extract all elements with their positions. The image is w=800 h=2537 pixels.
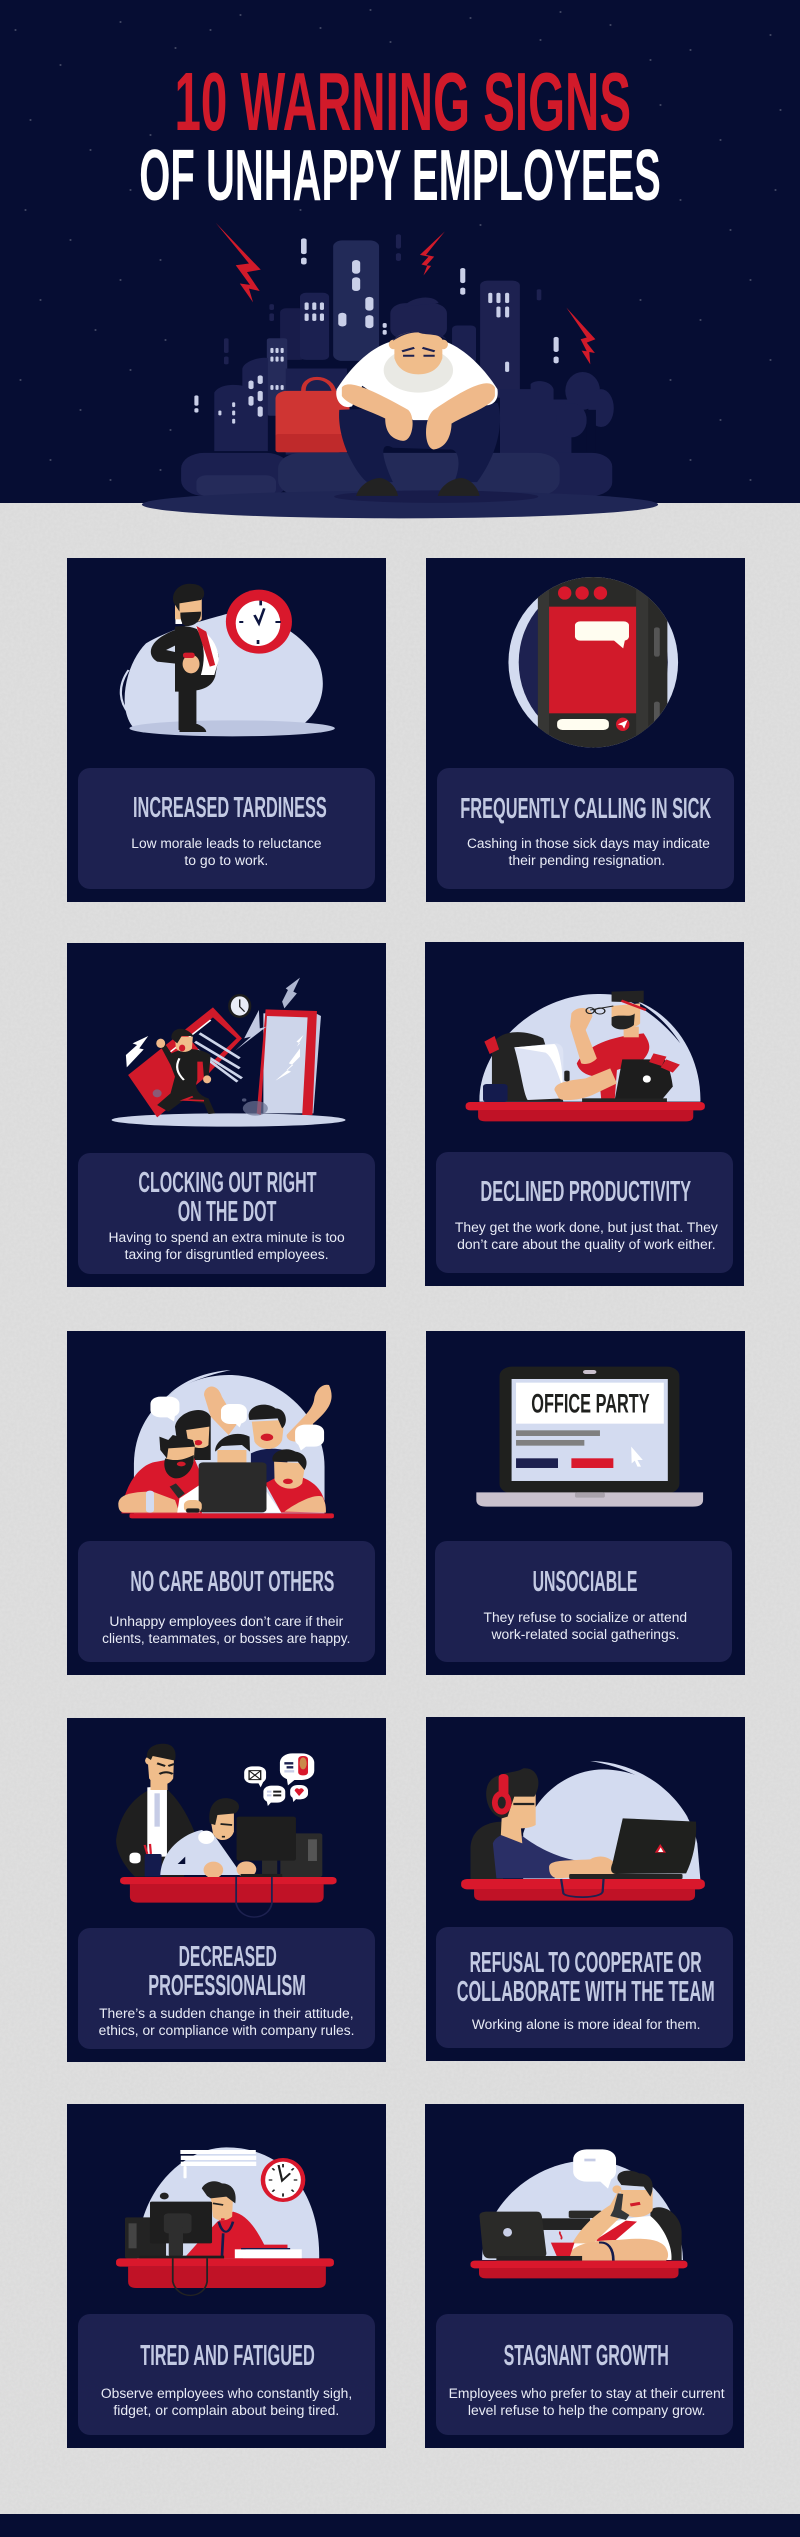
description: to go to work.	[184, 853, 268, 868]
card 5: no care about others	[67, 1331, 386, 1675]
exclamation marks	[194, 234, 559, 476]
panel background	[67, 1331, 386, 1675]
description: They refuse to socialize or attend	[484, 1610, 687, 1625]
heading: TIRED AND FATIGUED	[140, 2340, 315, 2372]
panel background	[67, 1718, 386, 2062]
description: taxing for disgruntled employees.	[125, 1247, 329, 1262]
description	[102, 1614, 350, 1646]
description	[108, 1230, 345, 1262]
description	[467, 836, 710, 868]
red bag	[276, 378, 349, 452]
panel background	[67, 558, 386, 902]
panel background	[67, 943, 386, 1287]
heading: PROFESSIONALISM	[148, 1970, 306, 2002]
card 1: increased tardiness	[67, 558, 386, 902]
description: fidget, or complain about being tired.	[113, 2403, 339, 2418]
panel background	[426, 1717, 745, 2061]
ground ellipse	[142, 491, 658, 518]
heading	[148, 1941, 306, 2002]
heading: CLOCKING OUT RIGHT	[138, 1167, 317, 1199]
illustration: laptop with office party invitation	[476, 1367, 703, 1507]
text box	[78, 2314, 375, 2435]
description: Unhappy employees don’t care if their	[109, 1614, 344, 1629]
description	[449, 2386, 725, 2418]
card 4: declined productivity	[425, 942, 744, 1286]
city skyline	[181, 240, 614, 496]
card 3: clocking out right on the dot	[67, 943, 386, 1287]
text box	[436, 2314, 733, 2435]
text box	[78, 768, 375, 889]
illustration: man checking watch beside clock	[121, 584, 335, 736]
text box	[78, 1153, 375, 1274]
illustration: relaxed man on phone	[471, 2149, 687, 2278]
card 7: decreased professionalism	[67, 1718, 386, 2062]
description: ethics, or compliance with company rules.	[99, 2023, 354, 2038]
description: their pending resignation.	[508, 853, 665, 868]
heading	[457, 1947, 715, 2008]
description: Employees who prefer to stay at their current	[449, 2386, 725, 2401]
description: don’t care about the quality of work either.	[457, 1237, 716, 1252]
text box	[78, 1928, 375, 2049]
text box	[436, 1152, 733, 1273]
heading: NO CARE ABOUT OTHERS	[130, 1566, 334, 1598]
description: level refuse to help the company grow.	[468, 2403, 705, 2418]
description: Working alone is more ideal for them.	[472, 2017, 700, 2032]
heading: DECREASED	[179, 1941, 277, 1973]
text box	[78, 1541, 375, 1662]
panel background	[426, 558, 745, 902]
description: Observe employees who constantly sigh,	[101, 2386, 352, 2401]
card 8: refusal to cooperate	[426, 1717, 745, 2061]
heading: INCREASED TARDINESS	[133, 792, 327, 824]
description	[484, 1610, 687, 1642]
card 2: frequently calling in sick	[426, 558, 745, 902]
description: clients, teammates, or bosses are happy.	[102, 1631, 350, 1646]
heading: ON THE DOT	[178, 1196, 277, 1228]
panel background	[67, 2104, 386, 2448]
footer bar	[0, 2514, 800, 2537]
lightning bolts	[216, 223, 595, 364]
illustration: man with headphones at laptop	[461, 1761, 705, 1901]
illustration: boss watching employee on social media	[116, 1744, 337, 1917]
illustration: cheering team around laptop	[118, 1370, 334, 1518]
text box	[436, 1927, 733, 2048]
description: Low morale leads to reluctance	[131, 836, 322, 851]
card 10: stagnant growth	[425, 2104, 744, 2448]
description	[101, 2386, 352, 2418]
description: Having to spend an extra minute is too	[108, 1230, 345, 1245]
description: They get the work done, but just that. They	[455, 1220, 718, 1235]
heading	[138, 1167, 317, 1228]
description: Cashing in those sick days may indicate	[467, 836, 710, 851]
sad man	[336, 298, 500, 496]
illustration: tired woman behind monitor	[116, 2147, 334, 2295]
hero illustration: sad employee in front of city	[142, 223, 658, 518]
text box	[437, 768, 734, 889]
lit windows	[218, 260, 509, 424]
description	[99, 2006, 354, 2038]
description: work-related social gatherings.	[490, 1627, 680, 1642]
description	[131, 836, 322, 868]
panel background	[426, 1331, 745, 1675]
panel background	[425, 2104, 744, 2448]
heading: UNSOCIABLE	[533, 1566, 638, 1598]
title	[139, 55, 661, 216]
text box	[435, 1541, 732, 1662]
card 6: unsociable	[426, 1331, 745, 1675]
illustration: phone with message	[508, 573, 678, 750]
heading: STAGNANT GROWTH	[504, 2340, 669, 2372]
description: There’s a sudden change in their attitude,	[99, 2006, 354, 2021]
header banner	[0, 0, 800, 503]
card 9: tired and fatigued	[67, 2104, 386, 2448]
illustration: man running out the door	[112, 978, 346, 1127]
illustration: frustrated man at desk	[466, 991, 705, 1121]
illustration: laptop with office party invitation: OFFICE PARTY	[531, 1389, 650, 1419]
panel background	[425, 942, 744, 1286]
description	[455, 1220, 718, 1252]
